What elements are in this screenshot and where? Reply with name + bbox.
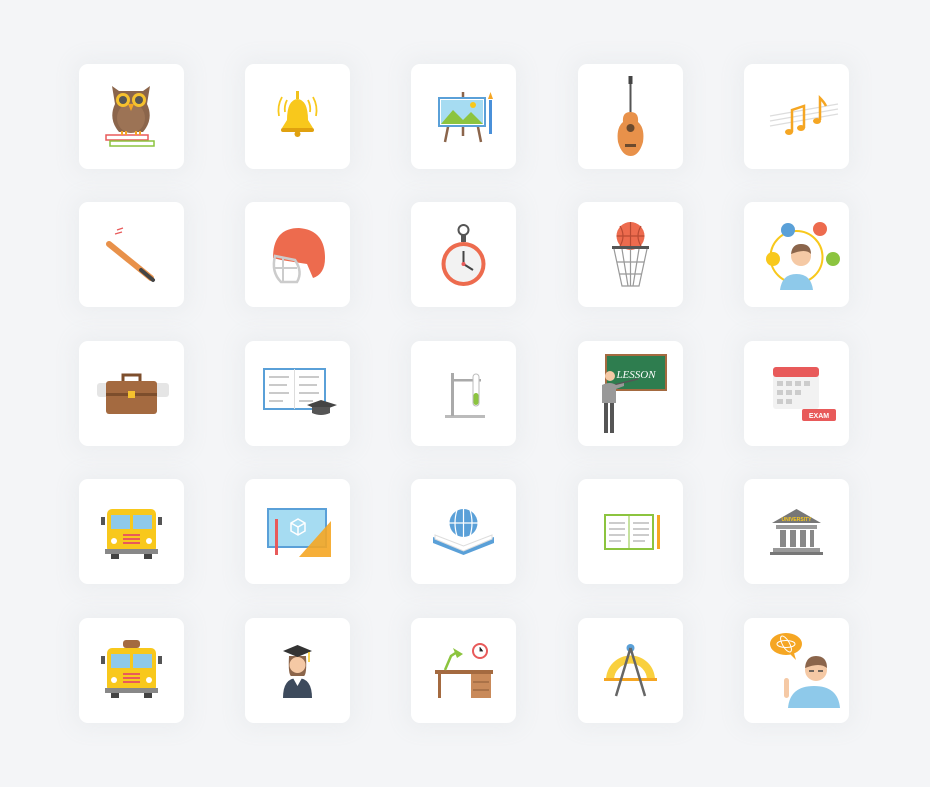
card: basketball hoop: [578, 202, 683, 307]
card: stopwatch: [411, 202, 516, 307]
card: easel: [411, 64, 516, 169]
card: school bus 2: [79, 618, 184, 723]
card: music notes: [744, 64, 849, 169]
card: blueprint: [245, 479, 350, 584]
card: university building: UNIVERSITY: [781, 517, 812, 523]
card: university building: [744, 479, 849, 584]
card: book with globe: [411, 479, 516, 584]
card: teacher with lesson board: LESSON: [615, 369, 656, 381]
card: calendar exam: [744, 341, 849, 446]
card: bell: [245, 64, 350, 169]
card: open notebook: [578, 479, 683, 584]
card: teacher with lesson board: [578, 341, 683, 446]
card: baseball bat: [79, 202, 184, 307]
card: school bus: [79, 479, 184, 584]
card: briefcase: [79, 341, 184, 446]
card: desk with lamp and clock: [411, 618, 516, 723]
card: calendar exam: EXAM: [809, 413, 829, 420]
card: compass and protractor: [578, 618, 683, 723]
card: graduate: [245, 618, 350, 723]
card: scientist with idea bubble: [744, 618, 849, 723]
card: football helmet: [245, 202, 350, 307]
card: math board with graduation cap: [245, 341, 350, 446]
card: owl on books: [79, 64, 184, 169]
card: teacher with science bubbles: [744, 202, 849, 307]
card: lab stand: [411, 341, 516, 446]
card: guitar: [578, 64, 683, 169]
